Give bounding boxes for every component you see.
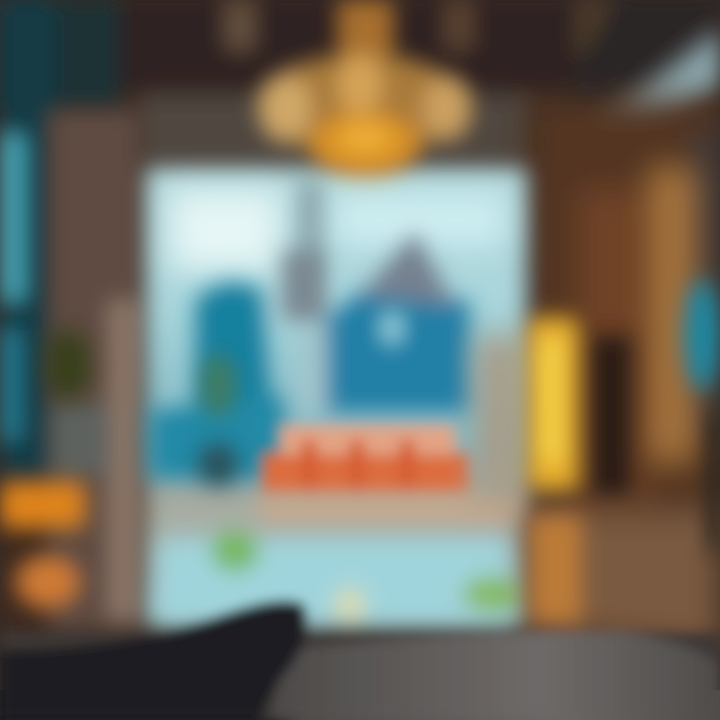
bottom dim band: [0, 632, 720, 720]
grey sofa: [270, 632, 720, 720]
plant: [44, 329, 92, 401]
yellow glowing panel: [528, 318, 578, 490]
bright sky: [170, 190, 505, 270]
left orange decor: [0, 482, 85, 608]
bottom edge backing: [0, 690, 720, 720]
chandelier glow: [339, 124, 391, 152]
city towers: [150, 232, 472, 480]
right wall: [530, 100, 720, 530]
chandelier: [258, 0, 471, 177]
amber floor reflection: [530, 515, 582, 623]
teal right object: [684, 279, 720, 391]
ceiling light strip: [560, 0, 720, 160]
right of window column: [475, 335, 525, 500]
plant in window: [200, 353, 236, 417]
ceiling with beams: [0, 0, 720, 165]
tower highlight: [379, 310, 405, 346]
dark cushion: [0, 600, 307, 720]
dark doorway: [590, 335, 632, 500]
orange row: [262, 425, 470, 494]
left window: [0, 0, 55, 480]
floor: [525, 510, 720, 650]
dark right edge: [705, 410, 720, 550]
left pillar: [48, 110, 142, 630]
main window: [146, 168, 526, 626]
dark vase: [198, 443, 238, 487]
lower window reflection: [160, 495, 522, 622]
window mullion: [297, 180, 323, 320]
